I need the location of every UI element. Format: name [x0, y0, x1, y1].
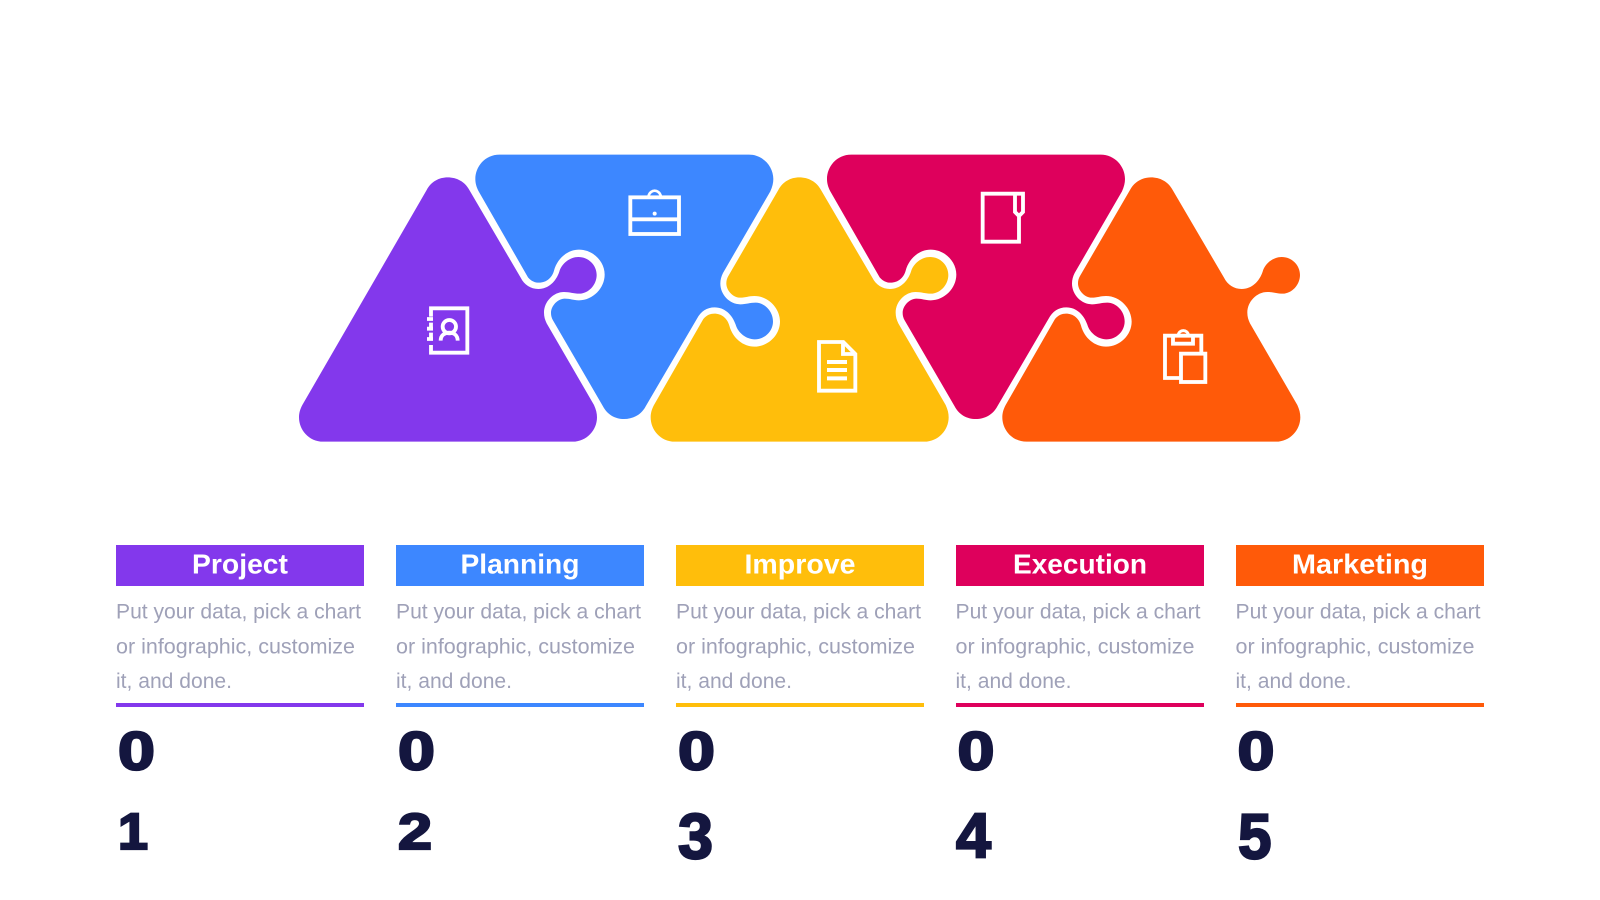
icon: briefcase	[630, 191, 679, 234]
body text	[116, 600, 361, 693]
body text: it, and done.	[1236, 669, 1352, 693]
puzzle piece: purple	[299, 177, 597, 442]
number 02: 2	[398, 803, 432, 860]
body text: or infographic, customize	[396, 634, 635, 658]
heading: Project: Project	[192, 548, 288, 580]
panel: Improve	[676, 545, 924, 872]
number 04: 4	[956, 802, 991, 872]
puzzle piece: magenta	[827, 155, 1125, 419]
number 01: 1	[118, 803, 148, 860]
number 01	[118, 722, 155, 860]
body text: it, and done.	[956, 669, 1072, 693]
heading: Project	[116, 545, 364, 586]
heading: Improve	[676, 545, 924, 586]
icon: contact book	[427, 308, 467, 353]
number 03: 3	[678, 800, 713, 872]
heading: Marketing	[1236, 545, 1484, 586]
icon: document	[819, 342, 855, 391]
panel: Planning	[396, 545, 644, 860]
body text: it, and done.	[676, 669, 792, 693]
body text: Put your data, pick a chart	[676, 600, 921, 624]
body text: Put your data, pick a chart	[116, 600, 361, 624]
puzzle piece: yellow	[651, 177, 949, 442]
body text	[1236, 600, 1481, 693]
icon: notebook with bookmark	[983, 194, 1023, 242]
number 05	[1238, 722, 1274, 872]
number 03: 0	[678, 722, 715, 782]
panel: Execution	[956, 545, 1204, 872]
underline	[1236, 703, 1484, 707]
number 05: 0	[1238, 722, 1274, 782]
number 01: 0	[118, 722, 155, 782]
puzzle piece: orange	[1002, 177, 1300, 442]
body text: Put your data, pick a chart	[396, 600, 641, 624]
number 02: 0	[398, 722, 435, 782]
heading: Execution: Execution	[1013, 548, 1147, 580]
heading: Planning: Planning	[460, 548, 580, 580]
heading: Planning	[396, 545, 644, 586]
body text: or infographic, customize	[1236, 634, 1474, 658]
body text	[676, 600, 921, 693]
body text: or infographic, customize	[116, 634, 355, 658]
underline	[676, 703, 924, 707]
number 04	[956, 722, 994, 872]
puzzle piece: blue	[475, 155, 773, 419]
underline	[396, 703, 644, 707]
body text: it, and done.	[116, 669, 232, 693]
body text	[956, 600, 1201, 693]
heading: Marketing: Marketing	[1292, 548, 1428, 580]
number 03	[678, 722, 715, 872]
body text: Put your data, pick a chart	[1236, 600, 1481, 624]
heading: Improve: Improve	[744, 548, 856, 580]
panel: Project	[116, 545, 364, 860]
body text: or infographic, customize	[676, 634, 915, 658]
body text: Put your data, pick a chart	[956, 600, 1201, 624]
body text: or infographic, customize	[956, 634, 1194, 658]
number 02	[398, 722, 435, 860]
icon: clipboards	[1165, 331, 1205, 382]
puzzle graphic	[299, 155, 1300, 442]
number 05: 5	[1238, 800, 1272, 872]
underline	[116, 703, 364, 707]
body text: it, and done.	[396, 669, 512, 693]
panel: Marketing	[1236, 545, 1484, 872]
body text	[396, 600, 641, 693]
number 04: 0	[958, 722, 994, 782]
underline	[956, 703, 1204, 707]
heading: Execution	[956, 545, 1204, 586]
